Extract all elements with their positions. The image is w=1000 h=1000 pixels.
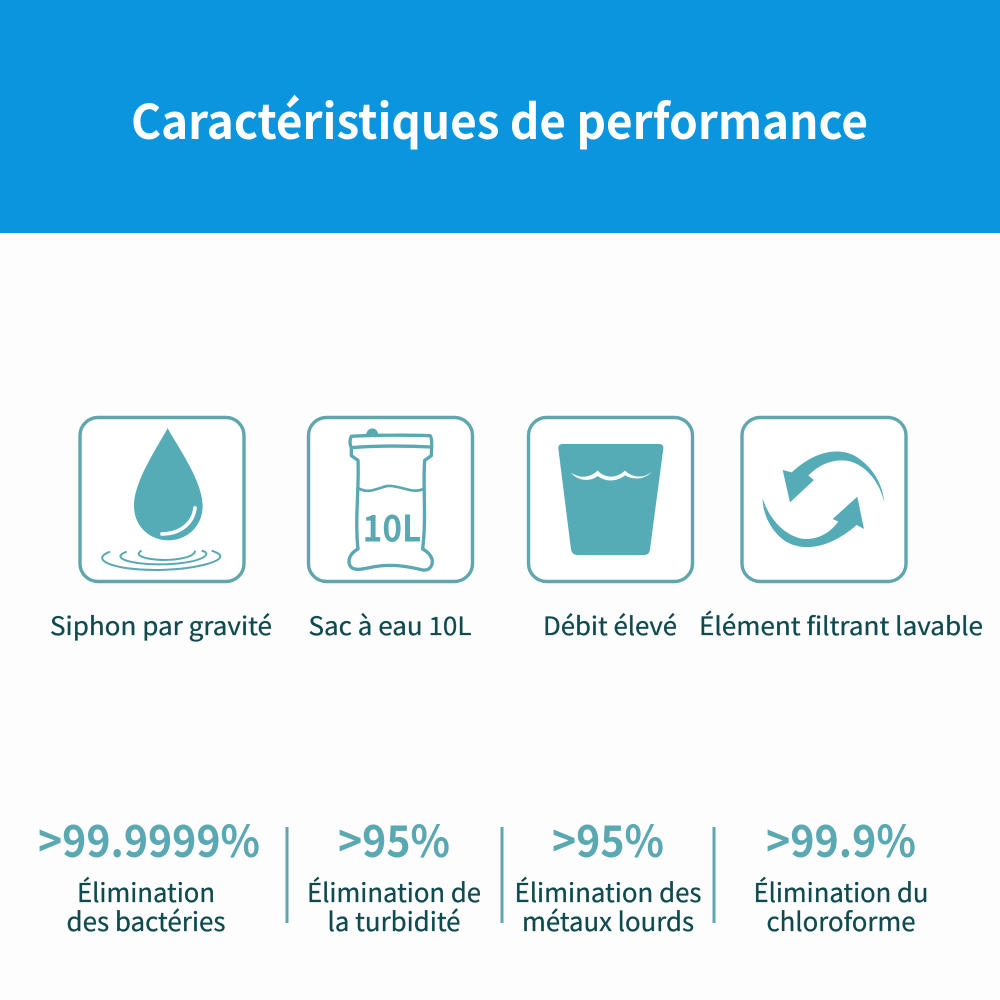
icon: water drop with ripples (102, 428, 220, 570)
icon: circular arrows (763, 451, 884, 547)
label: Élément filtrant lavable (699, 607, 983, 643)
stat label: Élimination (77, 873, 215, 910)
icon: glass of water (558, 444, 663, 555)
stat label: la turbidité (328, 902, 460, 939)
icon: 10L water bag (349, 428, 432, 570)
stat label (754, 873, 928, 939)
stat label (514, 873, 702, 939)
panel: siphon par gravité (50, 418, 272, 643)
stat: turbidité (307, 806, 481, 939)
divider (500, 827, 504, 923)
label: Sac à eau 10L (308, 607, 472, 643)
stat label (66, 873, 226, 939)
stat: bactéries: >99.9999% (38, 806, 260, 870)
10L mark: 10L (363, 499, 421, 553)
divider (712, 827, 716, 923)
panel: débit élevé (528, 418, 692, 643)
title: Caractéristiques de performance (131, 83, 868, 153)
stat: chloroforme: >99.9% (766, 806, 916, 870)
stat label (307, 873, 481, 939)
stat label: Élimination des (514, 873, 702, 910)
header banner (0, 0, 1000, 233)
panel: élément filtrant lavable (699, 418, 983, 643)
stat label: chloroforme (766, 902, 916, 939)
divider (286, 827, 288, 923)
stat label: Élimination de (307, 873, 481, 910)
label: Débit élevé (543, 607, 677, 643)
stat: chloroforme (754, 806, 928, 939)
stat: bactéries (38, 806, 260, 939)
label: Siphon par gravité (50, 607, 272, 643)
stat: turbidité: >95% (338, 806, 450, 870)
stat: métaux lourds (514, 806, 702, 939)
stat label: métaux lourds (522, 902, 694, 939)
stat label: des bactéries (66, 902, 226, 939)
stat label: Élimination du (754, 873, 928, 910)
panel: sac à eau 10L (308, 418, 472, 643)
stat: métaux lourds: >95% (552, 806, 664, 870)
